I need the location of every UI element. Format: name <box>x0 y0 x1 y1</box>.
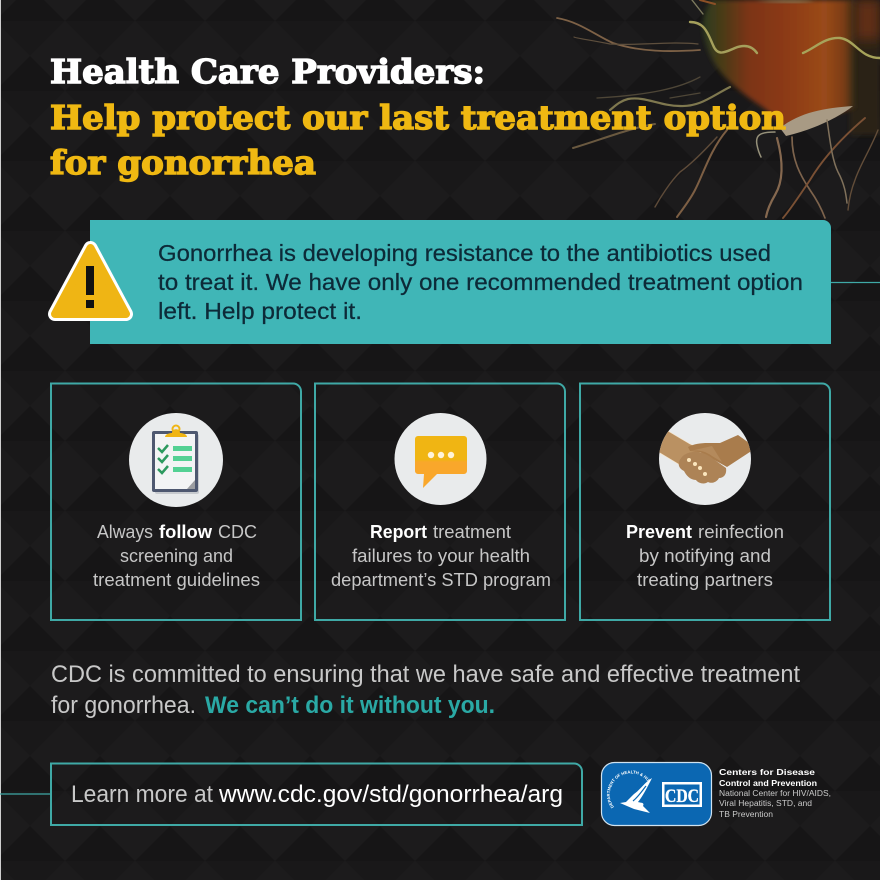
card text: treatment guidelines <box>93 569 260 590</box>
organization text: National Center for HIV/AIDS, <box>719 788 831 798</box>
callout: learn more link: Learn more at <box>71 781 213 808</box>
card text: by notifying and <box>639 545 771 566</box>
emphasis: We can’t do it without you. <box>205 692 495 719</box>
card text: failures to your health <box>352 545 530 566</box>
CDC mark: CDC <box>665 786 699 807</box>
organization text: Control and Prevention <box>719 778 817 788</box>
card text: department’s STD program <box>331 569 551 590</box>
card text: Always <box>97 521 153 542</box>
card text <box>331 521 551 590</box>
title line: audience: Health Care Providers: <box>50 52 485 91</box>
callout: learn more link: www.cdc.gov/std/gonorrhea/arg <box>218 781 563 808</box>
title line: call to action: Help protect our last treatment option <box>50 98 786 137</box>
icon: HHS seal <box>606 770 652 813</box>
panel: follow guidelines <box>51 384 301 620</box>
panel: report failures <box>315 384 565 620</box>
organization text: Viral Hepatitis, STD, and <box>719 798 812 808</box>
panel: prevent reinfection <box>580 384 830 620</box>
icon: HHS seal: DEPARTMENT OF HEALTH & HUMAN <box>606 770 650 808</box>
commitment statement <box>51 661 800 719</box>
icon: speech bubble <box>394 413 486 505</box>
card text <box>93 521 260 590</box>
card text: treatment <box>433 521 511 542</box>
organization text <box>719 767 831 819</box>
icon: clipboard checklist <box>129 413 223 507</box>
commitment statement: CDC is committed to ensuring that we have safe and effective treatment <box>51 661 800 688</box>
icon: handshake <box>655 413 756 505</box>
card text <box>626 521 784 590</box>
right connector line <box>831 282 880 284</box>
illustration: gonorrhea bacterium <box>557 0 880 218</box>
icon: warning triangle <box>55 248 126 314</box>
card text: Prevent <box>626 521 692 542</box>
banner text: to treat it. We have only one recommended treatment option <box>158 269 803 295</box>
banner text: left. Help protect it. <box>158 298 362 324</box>
logo: HHS and CDC <box>600 762 712 826</box>
left connector line <box>0 793 51 795</box>
title <box>50 52 786 182</box>
card text: reinfection <box>698 521 784 542</box>
organization text: TB Prevention <box>719 809 773 819</box>
banner text: Gonorrhea is developing resistance to the antibiotics used <box>158 240 771 266</box>
commitment statement: for gonorrhea. <box>51 692 196 719</box>
card text: CDC <box>218 521 257 542</box>
organization text: Centers for Disease <box>719 767 815 777</box>
card text: Report <box>370 521 427 542</box>
card text: screening and <box>120 545 233 566</box>
callout: learn more link <box>51 764 582 825</box>
panel: warning banner <box>90 220 831 344</box>
card text: treating partners <box>637 569 773 590</box>
card text: follow <box>159 521 213 542</box>
banner text <box>158 240 803 324</box>
title line: topic: for gonorrhea <box>50 143 316 182</box>
